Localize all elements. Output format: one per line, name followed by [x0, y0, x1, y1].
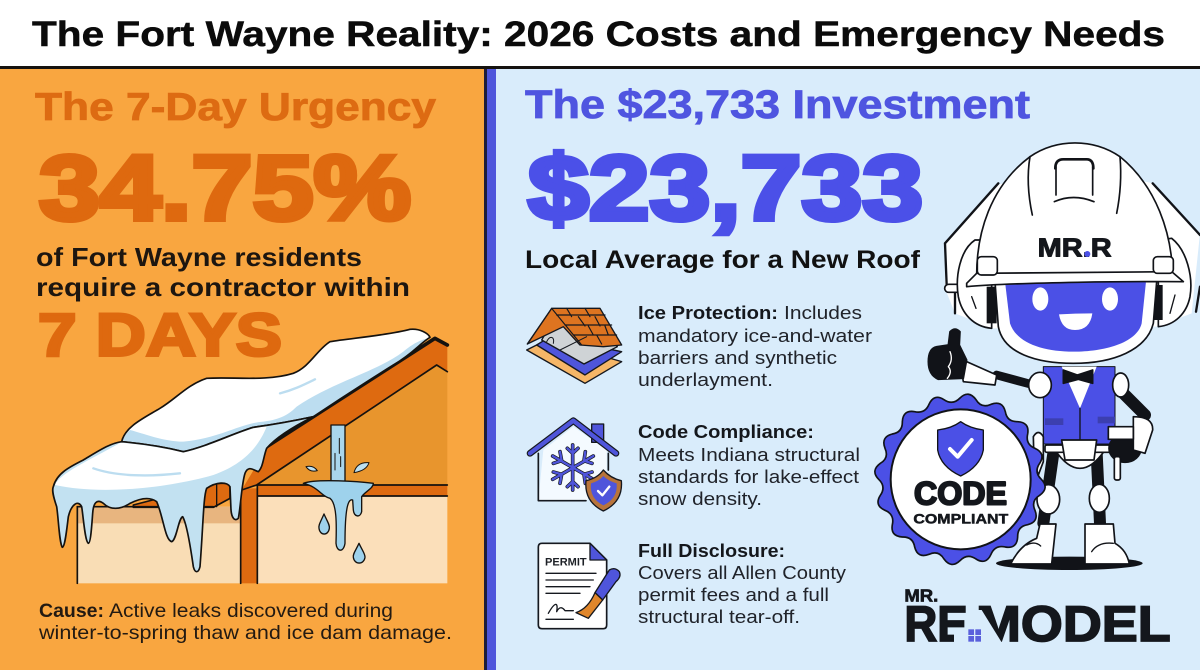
panel: the $23,733 investment [496, 69, 1200, 670]
item: code compliance: snow density. [638, 488, 762, 509]
hard hat [967, 143, 1183, 287]
mascot robot [875, 143, 1200, 570]
big stat: 7 days: 7 DAYS [38, 302, 282, 368]
cause caption [38, 600, 452, 644]
item: full disclosure: structural tear-off. [638, 606, 800, 627]
ear muffs [957, 238, 1191, 328]
robot body and vest [996, 367, 1153, 570]
big stat: 34.75%: 34.75% [39, 138, 411, 240]
item: full disclosure: Covers all Allen County [638, 562, 847, 583]
thumbs-up arm [928, 329, 1030, 385]
code compliant badge [875, 394, 1045, 564]
logo: mr. remodel: MODEL [976, 596, 1171, 652]
big stat: $23,733: $23,733 [528, 138, 923, 240]
logo: mr. remodel [904, 586, 1171, 652]
title banner [0, 0, 1200, 69]
stat description: Local Average for a New Roof [525, 246, 921, 274]
panel: the 7-day urgency [0, 69, 484, 670]
item: code compliance: standards for lake-effect [638, 466, 859, 487]
stat description [36, 242, 410, 302]
icon: roof layers [527, 308, 622, 383]
item: ice protection: barriers and synthetic [638, 347, 837, 368]
icon: house with snowflake and shield [530, 421, 622, 511]
item: code compliance: Code Compliance: [638, 421, 814, 442]
item: ice protection: underlayment. [638, 369, 773, 390]
water leak [303, 425, 373, 563]
snow mass with icicles [53, 329, 430, 572]
hard hat: MR.R [1038, 233, 1112, 263]
item: full disclosure: permit fees and a full [638, 584, 829, 605]
item: ice protection: Includes [784, 302, 862, 323]
item: ice protection [638, 302, 872, 390]
stat description: of Fort Wayne residents [36, 242, 362, 272]
title banner: The Fort Wayne Reality: 2026 Costs and Emergency Needs [32, 15, 1165, 54]
cause caption: Cause: [39, 600, 104, 622]
illustration: ice dam on roof with leak [53, 329, 447, 583]
icon: permit document with brush: PERMIT [545, 556, 587, 568]
logo: mr. remodel: RE [904, 596, 968, 652]
cause caption: winter-to-spring thaw and ice dam damage. [38, 622, 452, 644]
panel divider [484, 69, 496, 670]
icon: permit document with brush [538, 543, 620, 629]
item: code compliance: Meets Indiana structural [638, 444, 860, 465]
item: code compliance [638, 421, 860, 509]
item: ice protection: mandatory ice-and-water [638, 325, 872, 346]
heading: the 7-day urgency: The 7-Day Urgency [35, 86, 436, 129]
stat description: require a contractor within [36, 272, 410, 302]
code compliant badge: COMPLIANT [913, 510, 1009, 526]
cause caption: Active leaks discovered during [109, 600, 393, 622]
code compliant badge: CODE [914, 475, 1007, 511]
item: ice protection: Ice Protection: [638, 302, 778, 323]
item: full disclosure [638, 540, 847, 627]
head and face [995, 282, 1157, 363]
helmet flaps [945, 167, 1200, 328]
logo: mr. remodel: MR. [904, 586, 938, 606]
item: full disclosure: Full Disclosure: [638, 540, 785, 561]
heading: the $23,733 investment: The $23,733 Investment [525, 83, 1030, 127]
